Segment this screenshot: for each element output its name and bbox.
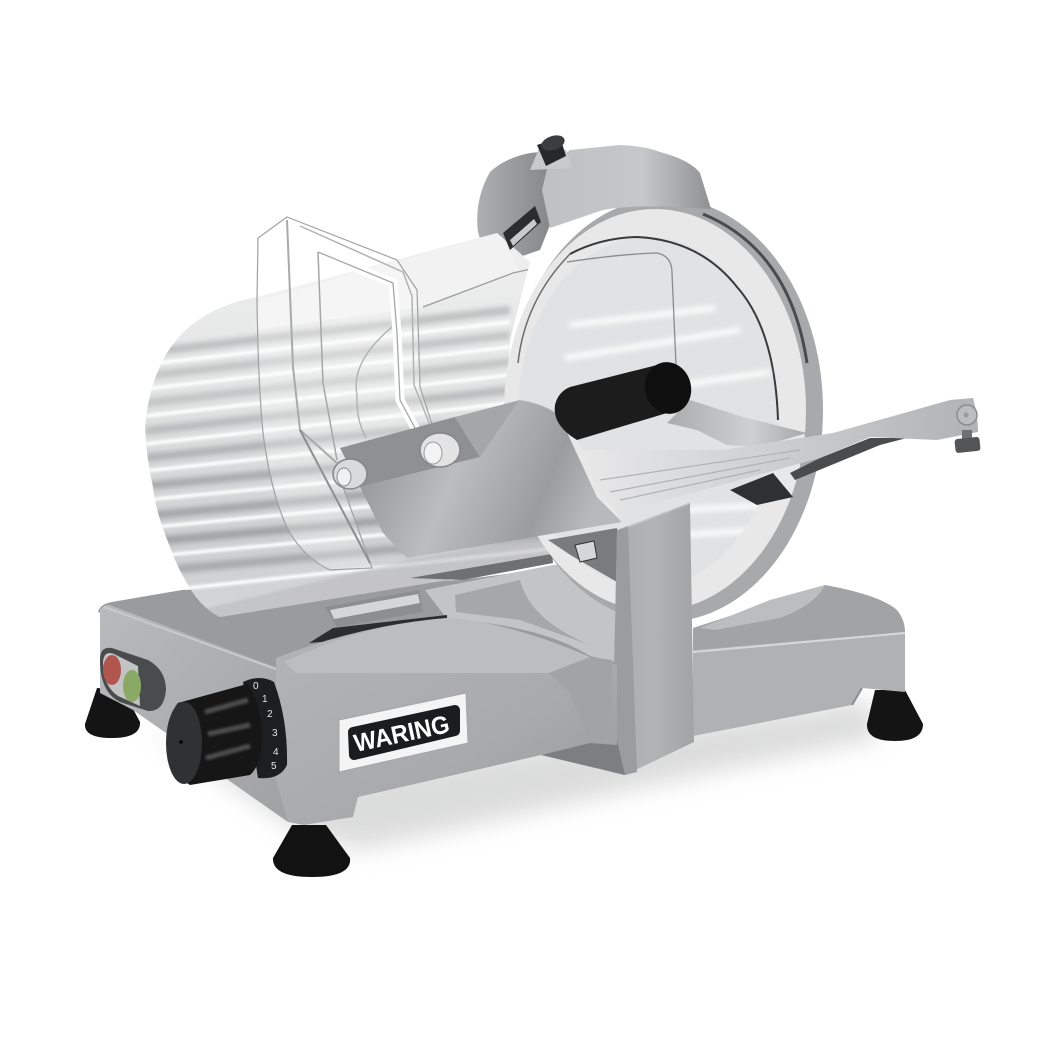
blade ring and disc xyxy=(504,209,807,611)
knob on top cap xyxy=(530,133,572,170)
support post xyxy=(612,503,694,775)
top cap front xyxy=(503,133,711,250)
slicing plate arm xyxy=(575,398,981,513)
product illustration: food slicer xyxy=(84,135,980,877)
front foot xyxy=(273,825,350,877)
base: top surface xyxy=(98,560,615,670)
feet: rear xyxy=(85,688,923,741)
bent support arm xyxy=(667,400,807,447)
base left panel xyxy=(100,605,288,822)
base: right section xyxy=(693,585,905,736)
base front body xyxy=(276,618,617,825)
power switch xyxy=(100,648,166,711)
recess under front body xyxy=(541,740,625,775)
blade housing outer rim xyxy=(507,198,825,630)
thickness dial: 4 xyxy=(273,747,279,758)
slide bracket and bolts xyxy=(309,528,617,643)
guard plate outline xyxy=(567,253,676,365)
thickness dial: 3 xyxy=(272,728,278,739)
thickness dial: 2 xyxy=(267,709,273,720)
transparent guard xyxy=(257,217,437,570)
black handle xyxy=(555,357,697,440)
brand badge: WARING xyxy=(351,710,452,758)
thickness dial xyxy=(166,678,287,785)
top cap back xyxy=(477,150,560,262)
ridged food tray xyxy=(145,233,563,625)
thickness dial: 1 xyxy=(262,694,268,705)
tray ridges: highlights xyxy=(145,322,560,590)
thickness dial: 0 xyxy=(253,681,259,692)
guard knuckles xyxy=(333,433,460,489)
food carriage chute xyxy=(333,400,622,558)
floor shadow xyxy=(150,700,880,850)
tray ridges: dark bands xyxy=(145,310,560,572)
thickness dial: 5 xyxy=(271,761,277,772)
brand badge xyxy=(339,693,468,772)
